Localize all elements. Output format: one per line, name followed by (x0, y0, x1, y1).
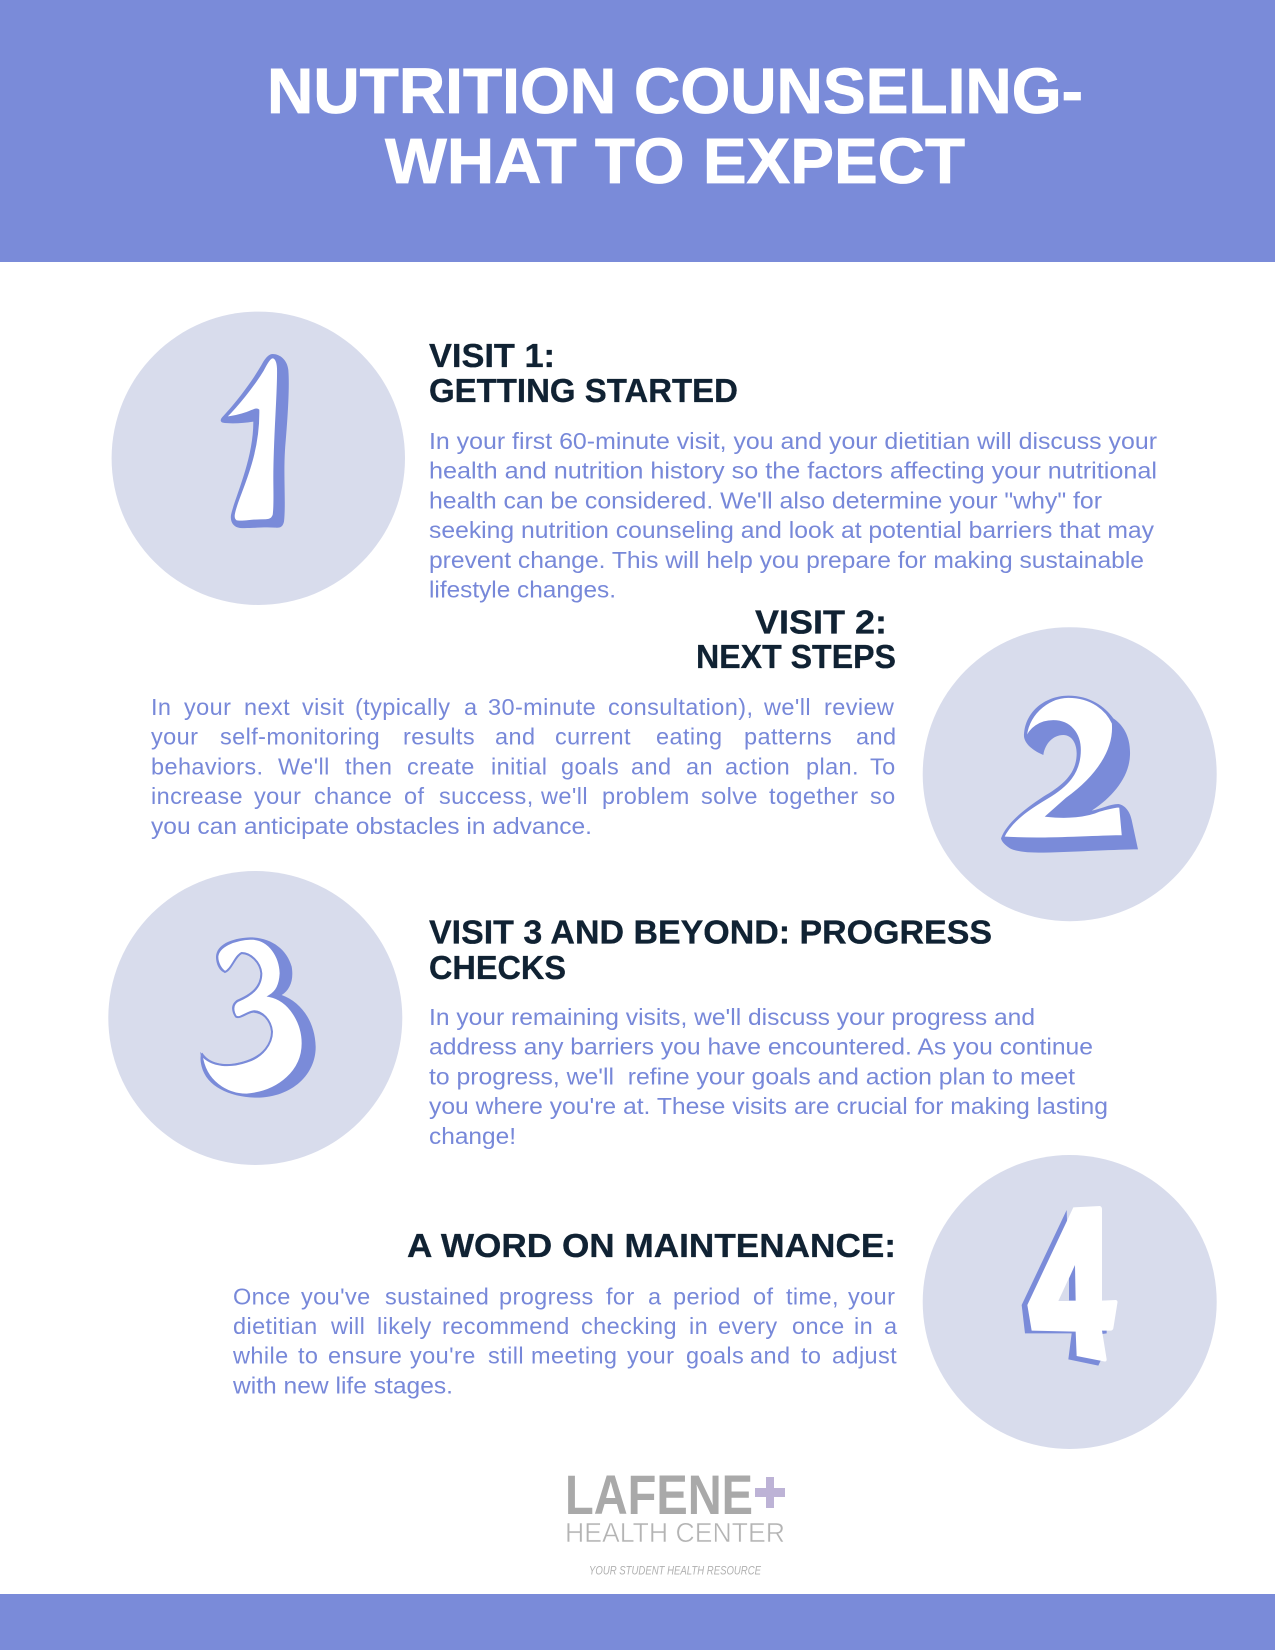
circle badge with number 3 (108, 871, 402, 1165)
body text: maintenance: will (330, 1313, 365, 1339)
body text: visit 2: (typically (355, 694, 450, 720)
body text: maintenance: while (232, 1343, 289, 1369)
body text: visit 2: and (495, 724, 535, 750)
body text: maintenance: recommend (442, 1313, 570, 1339)
body text: maintenance: goals (686, 1343, 744, 1369)
body text: visit 2: we'll (763, 694, 811, 720)
body text: visit 1: In your first 60-minute visit, you and your dietitian will discuss your (429, 428, 1157, 454)
body text: maintenance: period (673, 1283, 741, 1309)
body text: visit 2: consultation), (608, 694, 753, 720)
body text: visit 2: plan. (806, 753, 859, 779)
body text: visit 1: health and nutrition history so the factors affecting your nutritional (429, 458, 1157, 484)
body text: maintenance: meeting (531, 1343, 617, 1369)
body text: visit 2: solve (701, 783, 758, 809)
body text: maintenance: to (801, 1343, 821, 1369)
body text: visit 2: and (631, 753, 671, 779)
body text: maintenance: a (648, 1283, 662, 1309)
circle badge with number 2 (923, 627, 1217, 921)
heading: maintenance: A WORD ON MAINTENANCE: (407, 1227, 896, 1264)
body text: visit 2: of (404, 783, 424, 809)
body text: visit 2: so (870, 783, 896, 809)
body text: maintenance: for (606, 1283, 635, 1309)
title (267, 55, 1083, 197)
body text: visit 2: results (403, 724, 475, 750)
body text: visit 2: your (254, 783, 301, 809)
body text: visit 1: seeking nutrition counseling and look at potential barriers that may (429, 517, 1154, 543)
body text: visit 2: success, (439, 783, 534, 809)
body text: visit 2: initial (491, 753, 547, 779)
heading: visit 2: VISIT 2: (755, 604, 887, 640)
heading: visit 3: VISIT 3 AND BEYOND: PROGRESS (429, 914, 992, 950)
heading: visit 2 (696, 604, 896, 675)
body text: visit 2: then (345, 753, 392, 779)
body text: maintenance: in (854, 1313, 873, 1339)
heading: visit 2: NEXT STEPS (696, 638, 896, 675)
heading: visit 1: VISIT 1: (429, 337, 555, 374)
body text: visit 2: visit (302, 694, 345, 720)
body text: visit 2: self-monitoring (220, 724, 380, 750)
body text: visit 2: We'll (278, 753, 330, 779)
body text: visit 1 (429, 428, 1157, 603)
body text: visit 3: address any barriers you have encountered. As you continue (429, 1034, 1093, 1060)
body text: maintenance: ensure (328, 1343, 402, 1369)
body text: maintenance: adjust (832, 1343, 897, 1369)
body text: maintenance: of (753, 1283, 773, 1309)
body text: visit 2: chance (314, 783, 392, 809)
body text: visit 2: your (151, 724, 198, 750)
body text: maintenance: sustained (385, 1283, 489, 1309)
body text: visit 2: behaviors. (151, 753, 263, 779)
panel: visit 2 (151, 604, 1217, 921)
body text: visit 1: health can be considered. We'll also determine your "why" for (429, 487, 1102, 513)
header band with title (0, 0, 1275, 262)
body text: maintenance: your (848, 1283, 895, 1309)
body text: visit 2: we'll (540, 783, 588, 809)
body text: visit 2: increase (151, 783, 243, 809)
body text: visit 1: lifestyle changes. (429, 577, 616, 603)
body text: visit 2: current (555, 724, 631, 750)
body text: maintenance: every (718, 1313, 777, 1339)
body text: maintenance: once (792, 1313, 845, 1339)
panel: visit 3 (108, 871, 1108, 1165)
title: WHAT TO EXPECT (385, 125, 965, 197)
body text: visit 2: together (769, 783, 858, 809)
body text: visit 2: your (184, 694, 231, 720)
body text: visit 2: and (856, 724, 896, 750)
body text: maintenance: with new life stages. (232, 1372, 453, 1398)
body text: maintenance: to (298, 1343, 318, 1369)
body text: maintenance: time, (786, 1283, 839, 1309)
body text: visit 3: In your remaining visits, we'll discuss your progress and (429, 1004, 1035, 1030)
body text: visit 2: 30-minute (488, 694, 596, 720)
body text: maintenance (232, 1283, 898, 1398)
body text: visit 3: to progress, we'll refine your goals and action plan to meet (429, 1063, 1075, 1089)
heading: visit 3 (429, 914, 992, 986)
body text: visit 3: you where you're at. These visits are crucial for making lasting (429, 1093, 1108, 1119)
title: NUTRITION COUNSELING- (267, 55, 1083, 127)
heading: visit 3: CHECKS (429, 949, 566, 986)
body text: visit 2: patterns (744, 724, 832, 750)
logo: Lafene Health Center (565, 1463, 785, 1578)
logo wordmark: LAFENE (565, 1463, 753, 1526)
footer band (0, 1594, 1275, 1650)
body text: maintenance: checking (581, 1313, 677, 1339)
body text: visit 2: next (244, 694, 290, 720)
body text: visit 3: change! (429, 1123, 516, 1149)
body text: visit 2: a (464, 694, 478, 720)
body text: visit 2 (151, 694, 896, 839)
body text: maintenance: your (627, 1343, 674, 1369)
body text: visit 2: eating (656, 724, 722, 750)
body text: maintenance: a (884, 1313, 898, 1339)
body text: visit 2: To (870, 753, 896, 779)
body text: visit 2: create (407, 753, 475, 779)
icon: plus mark (755, 1477, 785, 1508)
circle badge with number 4 (923, 1155, 1217, 1449)
body text: maintenance: still (488, 1343, 524, 1369)
body text: visit 2: action (725, 753, 790, 779)
panel: visit 1 (112, 312, 1157, 605)
body text: maintenance: dietitian (233, 1313, 318, 1339)
body text: visit 2: In (151, 694, 171, 720)
heading: visit 1: GETTING STARTED (429, 372, 738, 409)
body text: visit 2: review (824, 694, 895, 720)
body text: maintenance: in (689, 1313, 708, 1339)
circle badge with number 1 (112, 312, 405, 605)
body text: maintenance: and (750, 1343, 790, 1369)
body text: maintenance: progress (499, 1283, 594, 1309)
body text: visit 2: problem (602, 783, 690, 809)
body text: visit 2: you can anticipate obstacles in advance. (151, 813, 592, 839)
body text: maintenance: you're (410, 1343, 476, 1369)
panel: maintenance (232, 1155, 1217, 1449)
body text: maintenance: likely (377, 1313, 432, 1339)
body text: visit 2: goals (561, 753, 619, 779)
body text: visit 1: prevent change. This will help you prepare for making sustainable (429, 547, 1144, 573)
logo subtitle: HEALTH CENTER (565, 1517, 785, 1548)
body text: maintenance: Once (233, 1283, 291, 1309)
body text: maintenance: you've (301, 1283, 371, 1309)
heading: visit 1 (429, 337, 738, 409)
body text: visit 2: an (686, 753, 713, 779)
body text: visit 3 (429, 1004, 1108, 1149)
logo tagline: YOUR STUDENT HEALTH RESOURCE (589, 1566, 761, 1578)
